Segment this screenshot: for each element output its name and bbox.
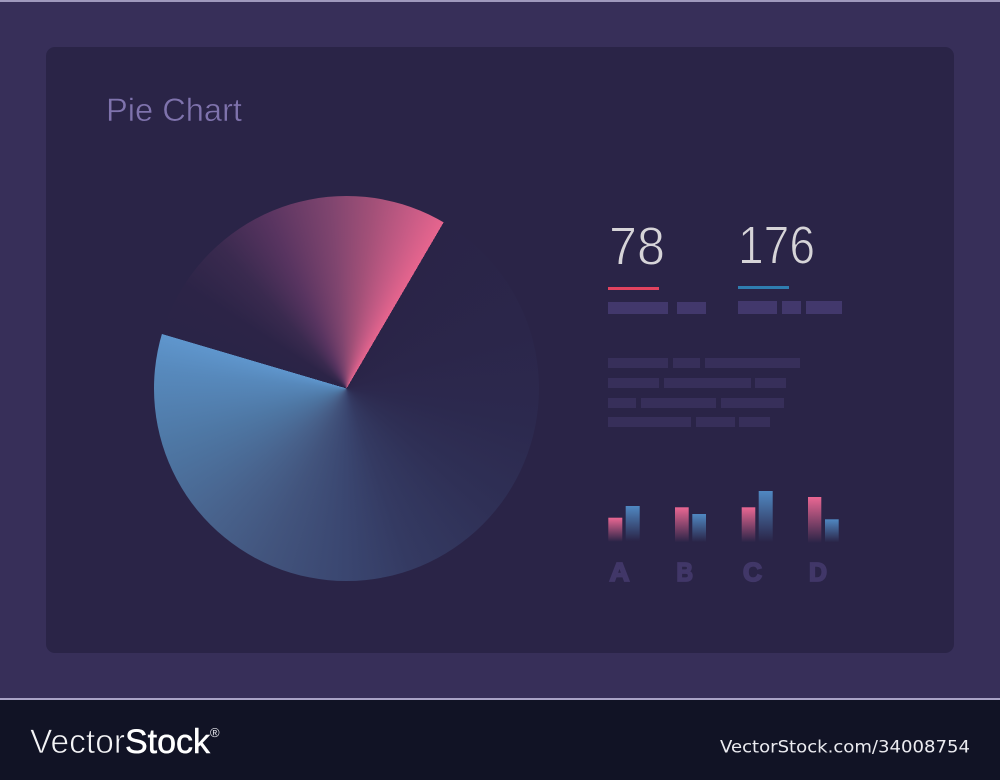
bars: group A — [608, 506, 640, 542]
top edge line — [0, 0, 1000, 2]
axis labels: D — [809, 559, 827, 587]
logo: VectorStock: Stock — [125, 723, 211, 761]
pie chart — [154, 196, 538, 580]
number 78: 78 — [609, 216, 665, 276]
stat: 78 — [608, 216, 706, 314]
logo: VectorStock: Vector — [30, 723, 125, 761]
title: Pie Chart — [106, 92, 242, 128]
bars: group C — [742, 491, 773, 542]
red underline — [608, 287, 659, 290]
bars: group D — [808, 497, 839, 543]
logo: VectorStock — [30, 723, 970, 761]
logo: VectorStock: ® — [210, 725, 220, 740]
number 176: 176 — [738, 216, 815, 276]
site url: VectorStock.com/34008754 — [720, 738, 970, 758]
bars: group B — [675, 507, 706, 542]
footer band — [0, 698, 1000, 780]
label placeholder bars — [608, 302, 706, 314]
footer top line — [0, 698, 1000, 700]
axis labels: B — [676, 559, 693, 587]
text block placeholder — [608, 358, 800, 427]
stat: 176 — [738, 216, 842, 314]
label placeholder bars — [738, 301, 842, 314]
axis labels — [610, 559, 827, 587]
panel: main card — [46, 47, 954, 653]
blue underline — [738, 286, 788, 289]
axis labels: C — [743, 559, 762, 587]
axis labels: A — [610, 559, 630, 587]
